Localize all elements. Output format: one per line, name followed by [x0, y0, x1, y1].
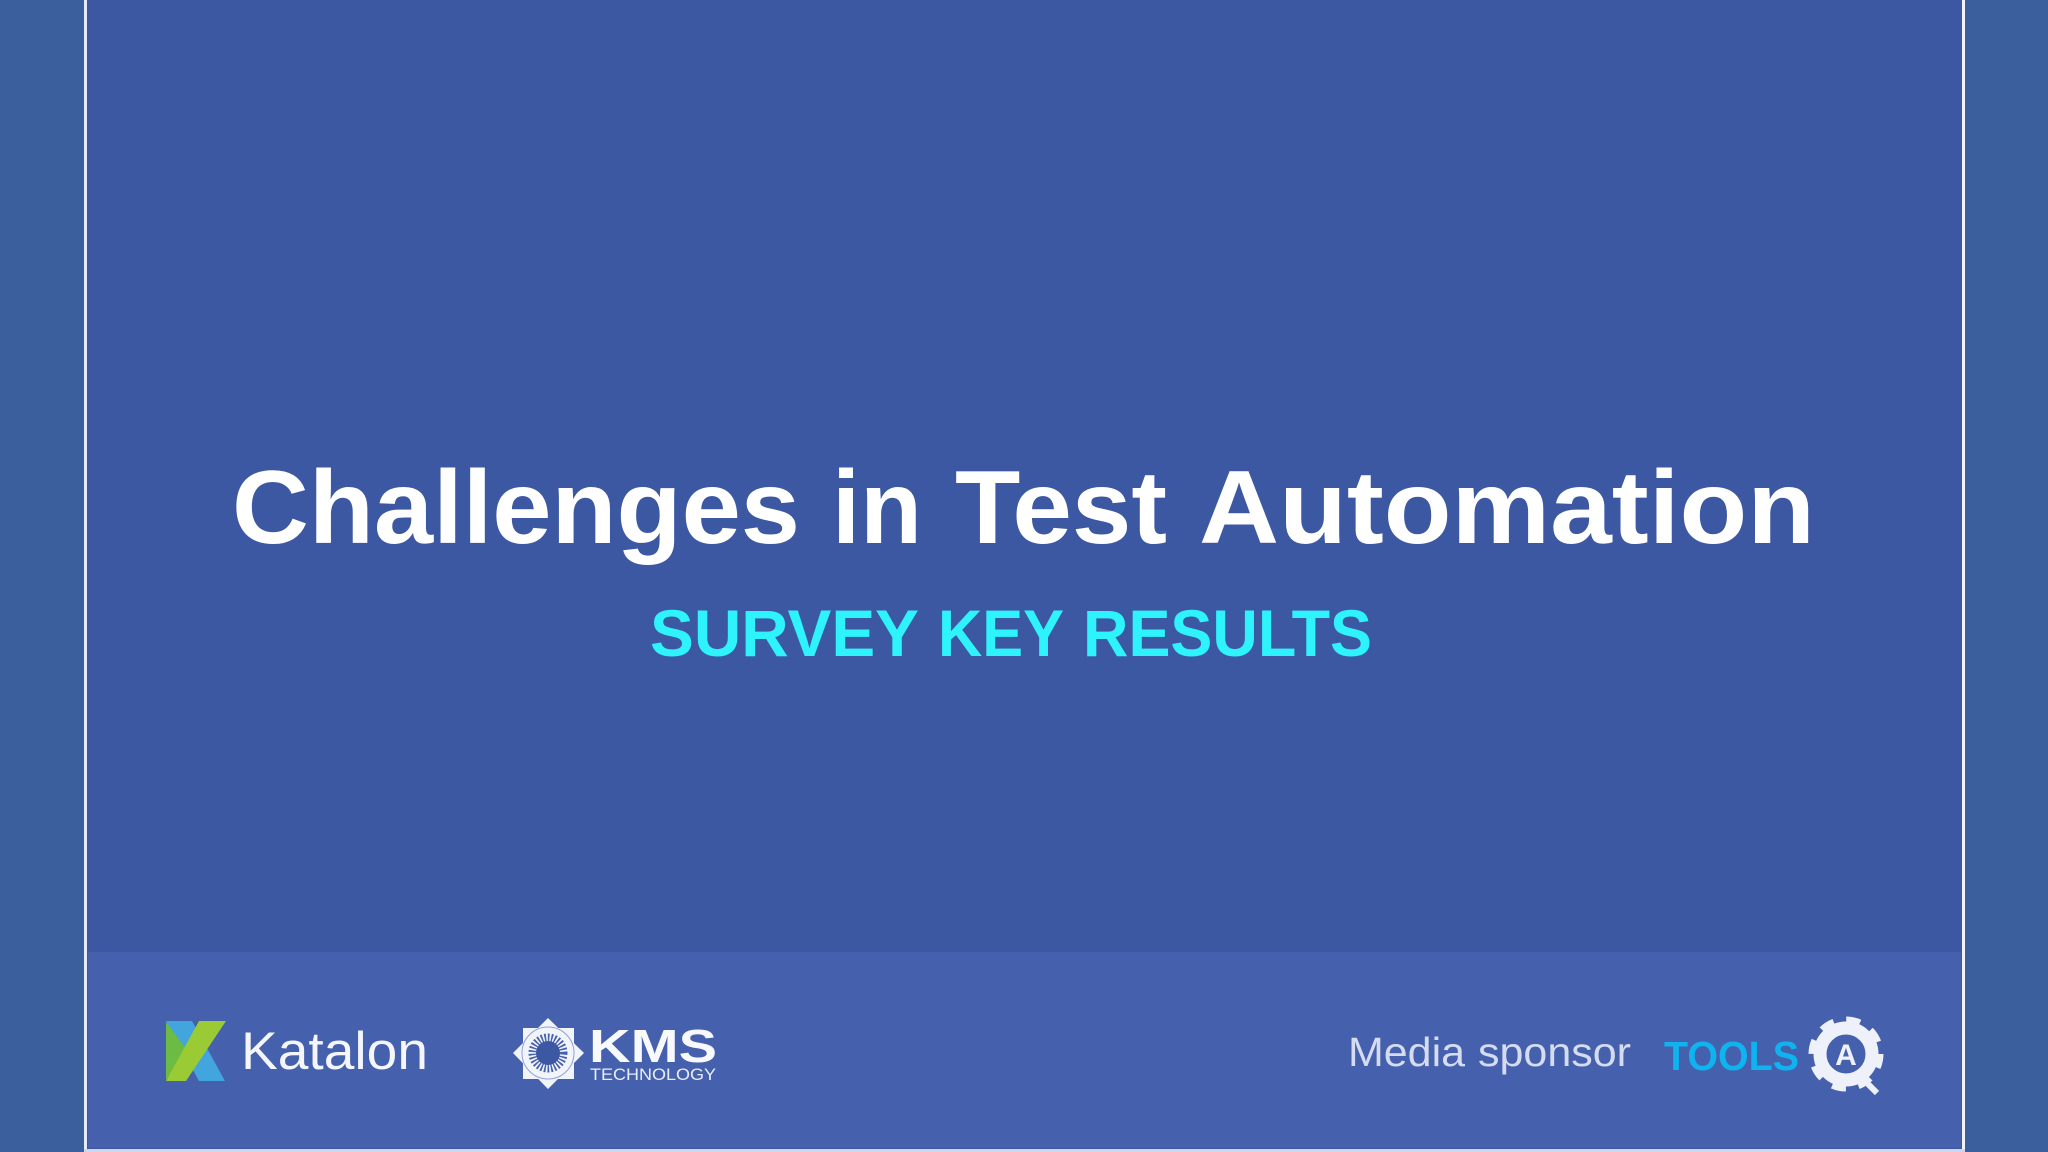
icon: KMS emblem	[513, 1018, 584, 1089]
KMS Technology wordmark: TECHNOLOGY	[590, 1065, 716, 1084]
media sponsor label: sponsor	[1478, 1029, 1631, 1075]
title: Test	[955, 450, 1167, 566]
title	[232, 450, 1815, 566]
subtitle: SURVEY	[650, 596, 919, 670]
icon: Tools QA gear	[1812, 1020, 1880, 1093]
KMS Technology wordmark	[589, 1020, 717, 1084]
subtitle	[650, 596, 1372, 670]
icon: Tools QA gear: A	[1835, 1039, 1857, 1072]
footer band	[84, 952, 1965, 1152]
media sponsor label	[1348, 1029, 1631, 1075]
Katalon wordmark: Katalon	[241, 1022, 428, 1081]
TOOLS wordmark: TOOLS	[1664, 1033, 1799, 1079]
title: in	[832, 450, 922, 566]
icon: Katalon logo mark	[166, 1021, 226, 1081]
KMS Technology wordmark: KMS	[589, 1020, 717, 1072]
subtitle: KEY	[938, 596, 1064, 670]
title: Automation	[1199, 450, 1815, 566]
title: Challenges	[232, 450, 800, 566]
media sponsor label: Media	[1348, 1029, 1465, 1075]
subtitle: RESULTS	[1083, 596, 1372, 670]
